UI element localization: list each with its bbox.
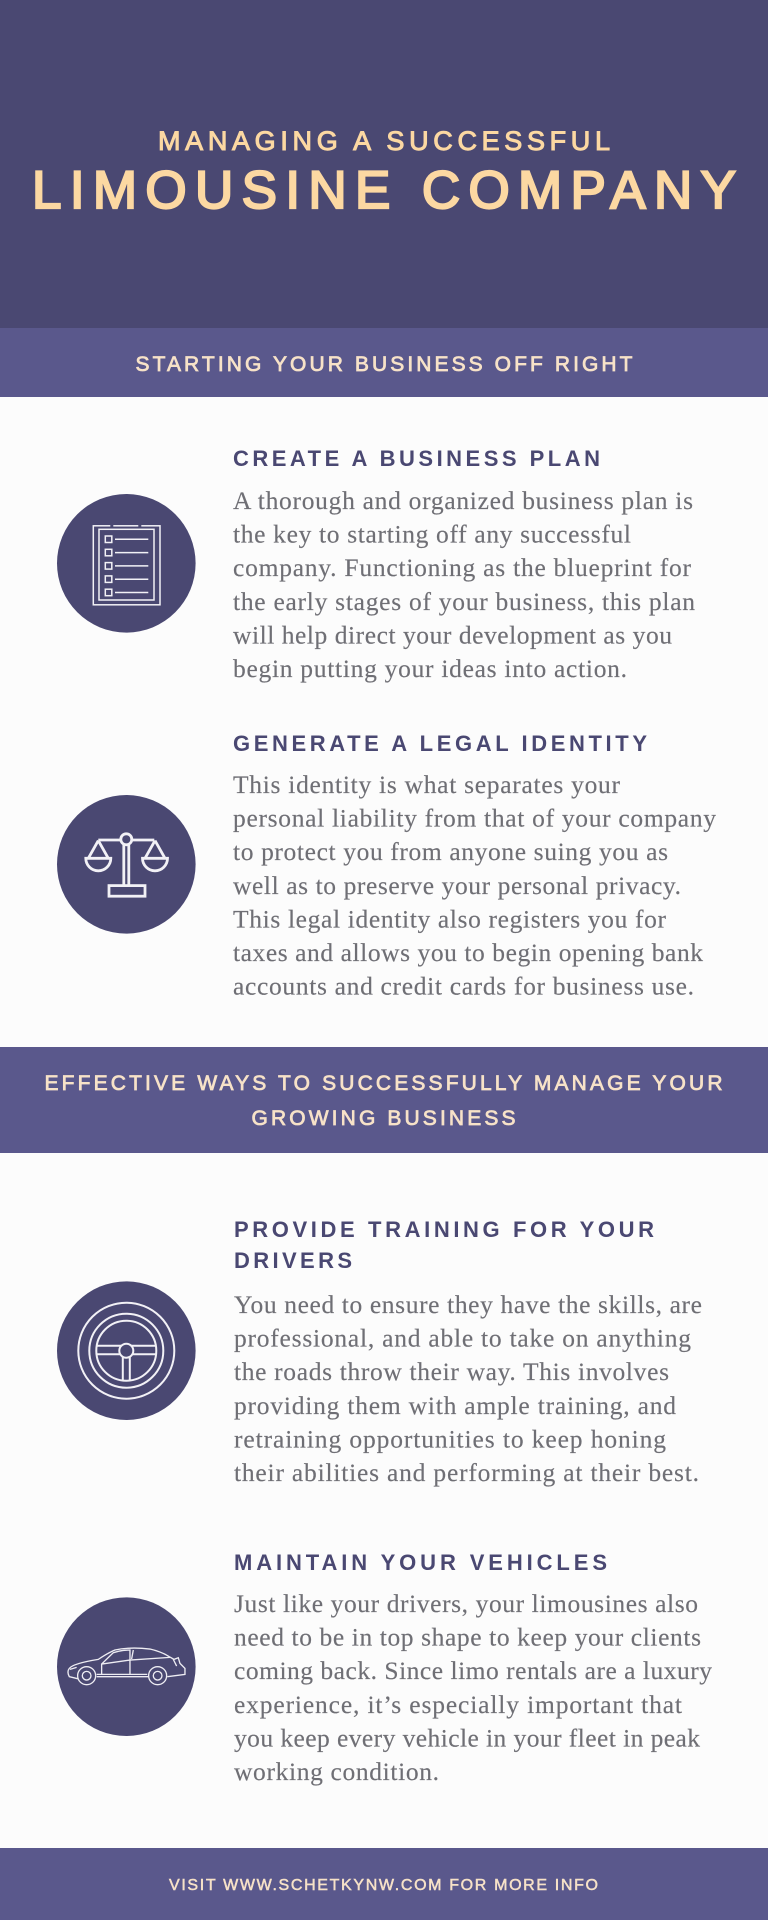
body text: taxes and allows you to begin opening bank: [233, 938, 703, 967]
body text: the early stages of your business, this plan: [233, 587, 695, 616]
title line 1: MANAGING A SUCCESSFUL: [158, 126, 610, 156]
footer text: VISIT WWW.SCHETKYNW.COM FOR MORE INFO: [169, 1877, 598, 1894]
icon: scales of justice: [57, 795, 196, 934]
heading: CREATE A BUSINESS PLAN: [233, 446, 600, 471]
header background: [0, 0, 768, 328]
body text: [233, 770, 716, 1001]
body text: experience, it’s especially important that: [234, 1690, 682, 1719]
body text: [234, 1290, 702, 1487]
body text: personal liability from that of your company: [233, 804, 716, 833]
body text: working condition.: [234, 1757, 439, 1786]
section banner: effective ways: [0, 1047, 768, 1153]
body text: Just like your drivers, your limousines also: [234, 1589, 698, 1618]
body text: [234, 1589, 712, 1786]
body text: begin putting your ideas into action.: [233, 654, 627, 683]
body text: the key to starting off any successful: [233, 520, 631, 549]
body text: you keep every vehicle in your fleet in peak: [234, 1724, 700, 1752]
body text: retraining opportunities to keep honing: [234, 1424, 666, 1454]
panel: title header: [0, 0, 768, 328]
body text: You need to ensure they have the skills, are: [234, 1290, 702, 1319]
banner background: [0, 1047, 768, 1153]
body text: company. Functioning as the blueprint for: [233, 553, 692, 582]
heading: MAINTAIN YOUR VEHICLES: [234, 1550, 607, 1575]
banner text: [44, 1072, 723, 1130]
body text: A thorough and organized business plan is: [233, 486, 693, 515]
heading: [234, 1217, 654, 1273]
body text: This legal identity also registers you for: [233, 904, 666, 934]
body text: the roads throw their way. This involves: [234, 1357, 669, 1386]
body text: to protect you from anyone suing you as: [233, 837, 668, 866]
block: generate a legal identity: [57, 731, 716, 1001]
section banner: starting your business: [0, 328, 768, 397]
block: maintain your vehicles: [57, 1550, 712, 1786]
icon: clipboard checklist: [57, 494, 196, 633]
heading: PROVIDE TRAINING FOR YOUR: [234, 1217, 654, 1242]
body text: their abilities and performing at their best.: [234, 1458, 699, 1487]
footer background: [0, 1848, 768, 1920]
body text: accounts and credit cards for business use.: [233, 972, 694, 1001]
block: create a business plan: [57, 446, 695, 683]
icon: steering wheel: [57, 1281, 196, 1420]
block: provide training for your drivers: [57, 1217, 702, 1487]
title line 2: LIMOUSINE COMPANY: [32, 161, 736, 220]
banner background: [0, 328, 768, 397]
body text: well as to preserve your personal privacy.: [233, 871, 681, 900]
body text: [233, 486, 695, 683]
body text: will help direct your development as you: [233, 620, 672, 650]
body text: providing them with ample training, and: [234, 1391, 676, 1420]
icon: car: [57, 1597, 196, 1736]
heading: GENERATE A LEGAL IDENTITY: [233, 731, 647, 756]
body text: professional, and able to take on anything: [234, 1324, 691, 1353]
body text: This identity is what separates your: [233, 770, 620, 799]
banner text: STARTING YOUR BUSINESS OFF RIGHT: [136, 353, 633, 376]
banner text: GROWING BUSINESS: [252, 1107, 516, 1130]
footer banner: [0, 1848, 768, 1920]
heading: DRIVERS: [234, 1248, 352, 1273]
body text: coming back. Since limo rentals are a luxury: [234, 1656, 712, 1685]
body text: need to be in top shape to keep your clients: [234, 1623, 701, 1652]
banner text: EFFECTIVE WAYS TO SUCCESSFULLY MANAGE YOUR: [44, 1072, 723, 1095]
